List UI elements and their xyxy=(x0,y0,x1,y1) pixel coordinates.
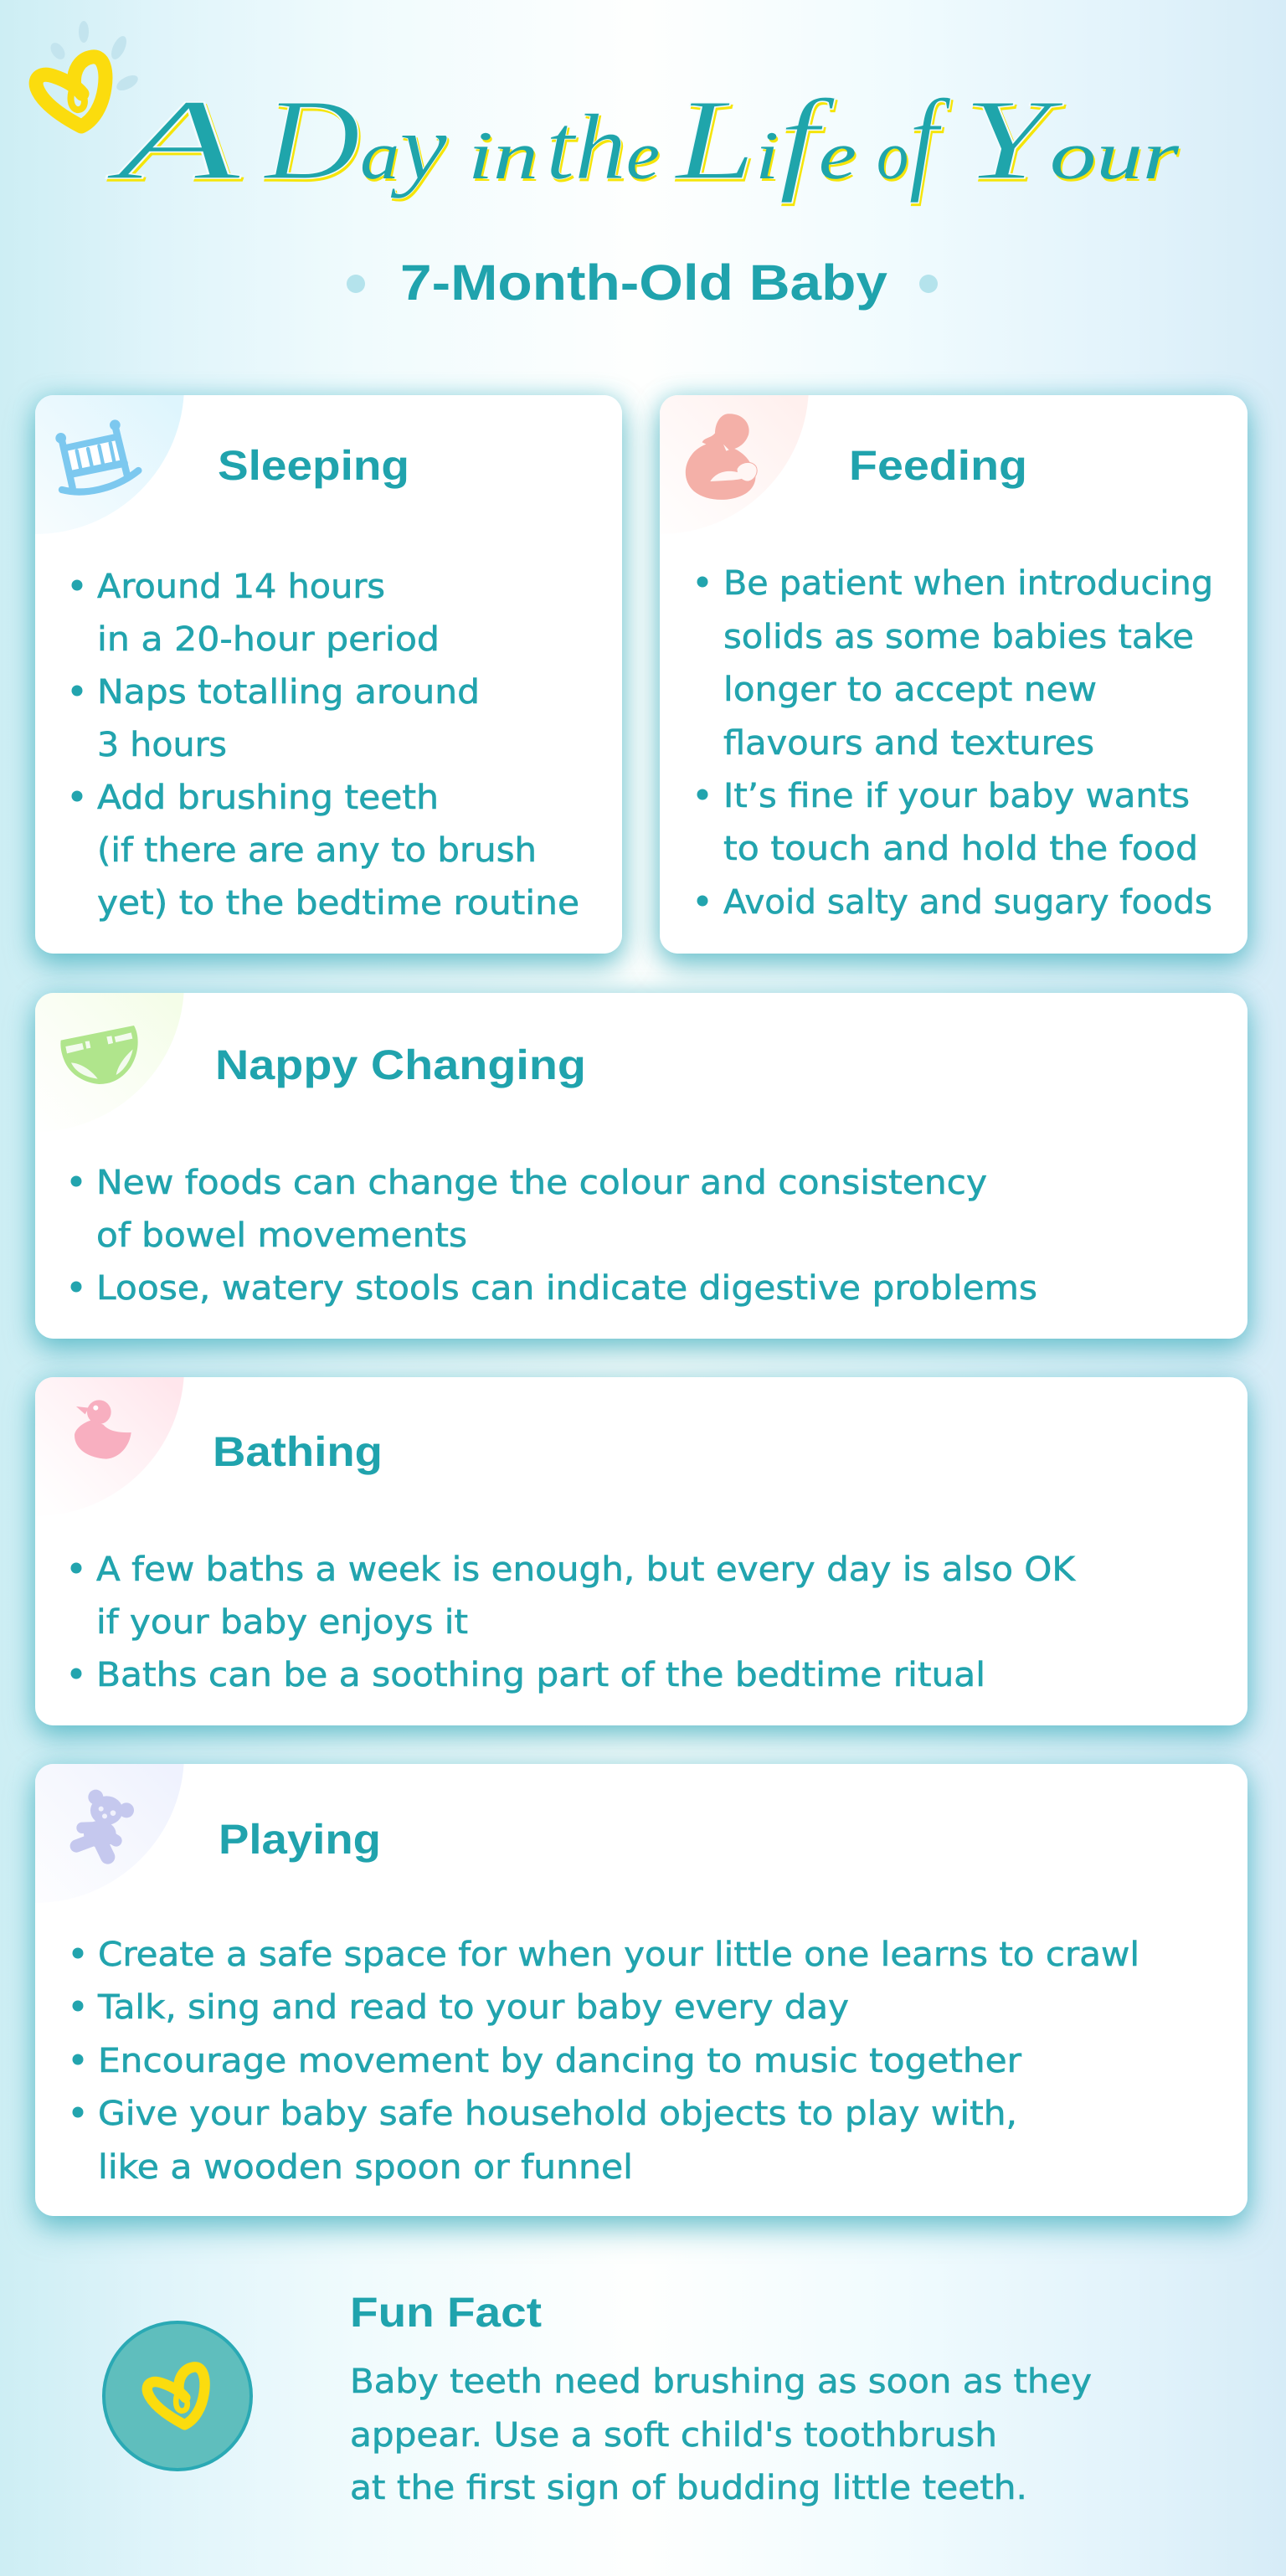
title: script heading xyxy=(105,75,1180,203)
icon: rocking crib xyxy=(55,419,138,491)
text block: feeding tips: Avoid salty and sugary foods xyxy=(723,883,1212,922)
icon: mother and baby xyxy=(686,414,757,500)
text block: feeding tips: to touch and hold the food xyxy=(723,830,1198,868)
text block: fun fact body xyxy=(350,2363,1092,2507)
text block: sleeping tips: in a 20-hour period xyxy=(97,620,440,659)
text block: feeding tips: solids as some babies take xyxy=(723,618,1194,656)
title: script heading: the xyxy=(546,95,660,199)
heading: playing: Playing xyxy=(219,1816,381,1863)
text block: feeding tips: Be patient when introducing xyxy=(723,564,1213,603)
text block: sleeping tips: Naps totalling around xyxy=(97,673,480,712)
icon: teddy bear xyxy=(76,1790,134,1857)
icon: rubber duck xyxy=(75,1400,131,1459)
text block: bathing tips: Baths can be a soothing part of the bedtime ritual xyxy=(96,1656,985,1694)
icon: heart badge xyxy=(104,2322,251,2470)
text block: nappy tips: New foods can change the colour and consistency xyxy=(96,1164,987,1202)
text block: feeding tips: flavours and textures xyxy=(723,724,1094,763)
text block: fun fact body: at the first sign of budding little teeth. xyxy=(350,2469,1027,2507)
text block: feeding tips xyxy=(697,564,1213,922)
subtitle with dots: 7-Month-Old Baby xyxy=(400,255,888,311)
text block: feeding tips: longer to accept new xyxy=(723,671,1097,709)
text block: playing tips: Encourage movement by dancing to music together xyxy=(98,2042,1022,2080)
title: script heading: Day xyxy=(263,75,447,203)
header: logo and title xyxy=(28,21,1181,311)
heading: sleeping: Sleeping xyxy=(218,442,409,489)
title: script heading: Life xyxy=(674,75,856,203)
panel: sleeping xyxy=(35,395,622,954)
title: script heading: Y our xyxy=(963,75,1180,203)
panel: nappy changing xyxy=(35,993,1247,1339)
heading: feeding: Feeding xyxy=(849,442,1027,489)
text block: playing tips: Create a safe space for when your little one learns to crawl xyxy=(98,1936,1139,1974)
title: script heading: A xyxy=(105,75,241,203)
panel: fun fact xyxy=(102,2289,1092,2507)
text block: playing tips: Talk, sing and read to your baby every day xyxy=(97,1988,849,2027)
text block: playing tips: like a wooden spoon or funnel xyxy=(98,2148,633,2187)
text block: sleeping tips: 3 hours xyxy=(97,726,227,764)
text block: sleeping tips: Around 14 hours xyxy=(97,568,385,606)
heading: bathing: Bathing xyxy=(213,1428,383,1475)
text block: bathing tips xyxy=(70,1550,1077,1694)
text block: feeding tips: It’s fine if your baby wants xyxy=(723,777,1190,815)
text block: sleeping tips: yet) to the bedtime routine xyxy=(97,884,579,923)
text block: nappy tips: Loose, watery stools can indicate digestive problems xyxy=(96,1269,1037,1308)
text block: sleeping tips: (if there are any to brush xyxy=(97,831,537,870)
text block: sleeping tips: Add brushing teeth xyxy=(97,779,439,817)
text block: bathing tips: if your baby enjoys it xyxy=(96,1603,468,1642)
icon: logo heart with rays xyxy=(36,21,141,126)
text block: playing tips: Give your baby safe household objects to play with, xyxy=(98,2095,1017,2133)
text block: fun fact body: appear. Use a soft child's toothbrush xyxy=(350,2416,997,2455)
text block: bathing tips: A few baths a week is enough, but every day is also OK xyxy=(96,1550,1077,1589)
panel: playing xyxy=(35,1764,1247,2216)
icon: nappy xyxy=(60,1026,138,1084)
title: script heading: of xyxy=(877,75,952,203)
text block: playing tips xyxy=(72,1936,1139,2187)
text block: nappy tips xyxy=(70,1164,1037,1308)
text block: sleeping tips xyxy=(72,568,579,923)
text block: nappy tips: of bowel movements xyxy=(96,1216,467,1255)
text block: fun fact body: Baby teeth need brushing as soon as they xyxy=(350,2363,1092,2401)
panel: bathing xyxy=(35,1377,1247,1725)
title: script heading: in xyxy=(468,117,538,193)
panel: feeding xyxy=(660,395,1247,954)
heading: nappy changing: Nappy Changing xyxy=(215,1041,586,1088)
heading: fun fact: Fun Fact xyxy=(350,2289,542,2336)
